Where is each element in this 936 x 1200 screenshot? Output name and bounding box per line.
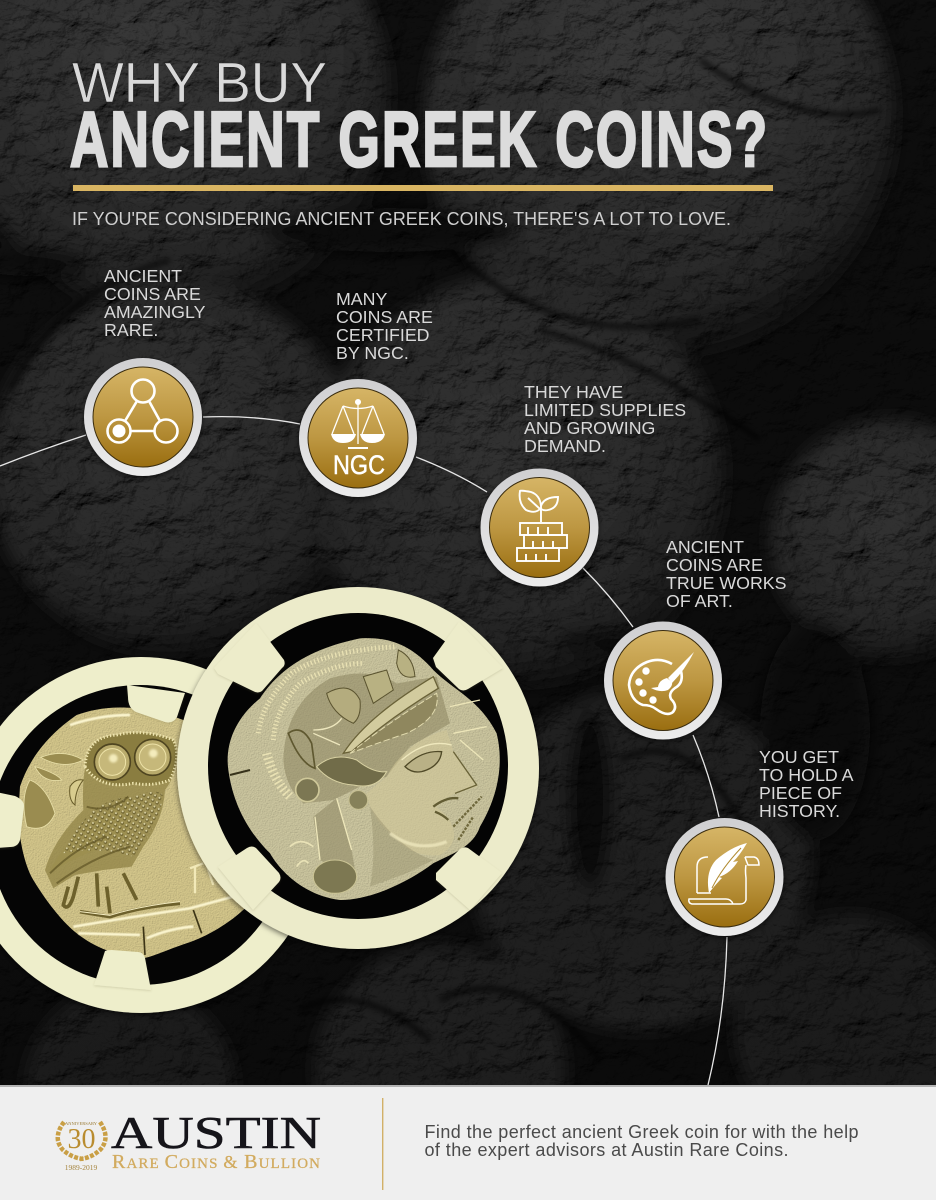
point 4: works of art xyxy=(604,537,787,740)
logo: wordmark: AUSTIN xyxy=(111,1107,321,1158)
Athena coin body xyxy=(228,638,500,900)
helmet crest xyxy=(258,647,397,740)
text: limited supplies: LIMITED SUPPLIES xyxy=(524,400,686,420)
helmet bowl xyxy=(283,674,450,803)
text: certified by NGC: BY NGC. xyxy=(336,343,409,363)
text: works of art: TRUE WORKS xyxy=(666,573,787,593)
Athena holder tabs xyxy=(214,622,503,910)
title: ancient greek coins: ANCIENT GREEK COINS? xyxy=(70,97,767,184)
text: certified by NGC: COINS ARE xyxy=(336,307,433,327)
footer divider xyxy=(382,1098,383,1190)
text: amazingly rare: COINS ARE xyxy=(104,284,201,304)
badge: rarity nodes icon xyxy=(84,358,202,476)
badge: paint palette icon xyxy=(604,622,722,740)
logo: 30 year wreath: 30 xyxy=(68,1123,96,1155)
title: why buy: WHY BUY xyxy=(72,51,327,115)
AOE letters xyxy=(190,863,213,893)
text: limited supplies: AND GROWING xyxy=(524,418,655,438)
point 2: certified xyxy=(299,289,433,497)
neck xyxy=(313,798,357,880)
gold divider bar xyxy=(73,185,773,191)
owl coin body xyxy=(18,707,247,958)
headband xyxy=(343,677,438,753)
coin: Athena obverse in NGC holder xyxy=(177,587,539,949)
text: works of art: COINS ARE xyxy=(666,555,763,575)
background relief strokes xyxy=(10,60,880,1060)
eye and mouth xyxy=(405,752,442,772)
connecting curve xyxy=(0,417,727,1085)
owl holder tabs xyxy=(0,685,185,990)
text: piece of history: TO HOLD A xyxy=(759,765,854,785)
face xyxy=(367,730,477,855)
coin: owl reverse in NGC holder xyxy=(0,657,319,1013)
footer call to action: of the expert advisors at Austin Rare Coins. xyxy=(424,1140,788,1160)
owl figure xyxy=(45,733,180,917)
logo: 30 year wreath: 1989-2019 xyxy=(65,1163,97,1172)
text: piece of history: HISTORY. xyxy=(759,801,840,821)
text: limited supplies: THEY HAVE xyxy=(524,382,623,402)
olive sprig xyxy=(24,753,83,828)
helmet decorations xyxy=(327,688,360,723)
badge: NGC scales icon: NGC xyxy=(333,450,385,480)
badge: quill and scroll icon xyxy=(666,818,784,936)
logo: wordmark: RARE COINS & BULLION xyxy=(112,1151,320,1173)
badge: plant on coin stack icon xyxy=(480,468,598,586)
text: amazingly rare: RARE. xyxy=(104,320,158,340)
logo: wordmark xyxy=(111,1107,321,1173)
text: works of art: OF ART. xyxy=(666,591,733,611)
footer band xyxy=(0,1085,936,1200)
logo: 30 year wreath xyxy=(58,1121,106,1172)
point 1: rare xyxy=(84,266,206,476)
coin ledge highlights xyxy=(70,715,233,938)
footer call to action: Find the perfect ancient Greek coin for with the help xyxy=(424,1122,858,1142)
text: limited supplies: DEMAND. xyxy=(524,436,606,456)
text: amazingly rare: AMAZINGLY xyxy=(104,302,206,322)
text: certified by NGC: CERTIFIED xyxy=(336,325,430,345)
text: works of art: ANCIENT xyxy=(666,537,744,557)
text: piece of history: YOU GET xyxy=(759,747,839,767)
point 5: piece of history xyxy=(666,747,854,936)
logo: 30 year wreath: ANNIVERSARY xyxy=(65,1121,98,1126)
text: certified by NGC: MANY xyxy=(336,289,388,309)
subtitle: IF YOU'RE CONSIDERING ANCIENT GREEK COINS, THERE'S A LOT TO LOVE. xyxy=(72,209,731,229)
neck lines and curls xyxy=(315,798,352,860)
point 3: limited supplies xyxy=(480,382,686,586)
text: piece of history: PIECE OF xyxy=(759,783,842,803)
badge: NGC scales icon xyxy=(299,379,417,497)
text: amazingly rare: ANCIENT xyxy=(104,266,182,286)
